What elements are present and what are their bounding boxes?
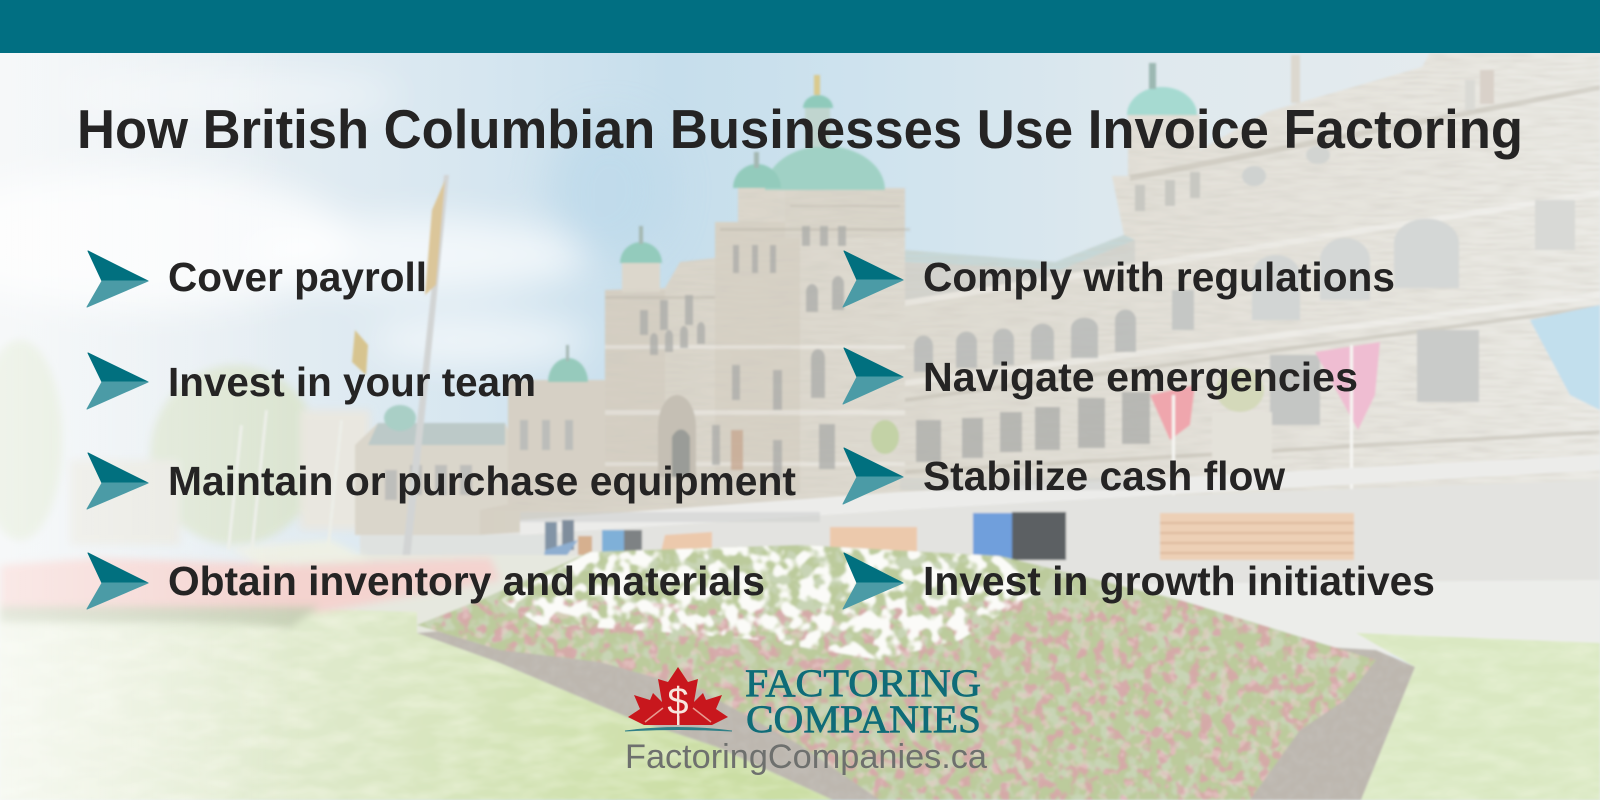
wordmark: FACTORING — [745, 662, 981, 705]
icon: arrow — [87, 353, 148, 409]
hanging banners — [871, 305, 1600, 522]
item: Maintain or purchase equipment — [87, 453, 796, 509]
icon: arrow — [87, 553, 148, 609]
icon: arrow — [843, 251, 903, 307]
pavement behind beds — [300, 555, 620, 640]
item: Obtain inventory and materials — [87, 553, 765, 609]
main building facade — [480, 53, 1600, 590]
label: Maintain or purchase equipment — [168, 458, 796, 504]
domes — [620, 55, 1300, 263]
label: Navigate emergencies — [923, 354, 1358, 400]
icon: arrow — [843, 553, 903, 609]
label: Obtain inventory and materials — [168, 558, 765, 604]
windows — [640, 70, 1575, 480]
logo — [625, 662, 987, 776]
wordmark: COMPANIES — [746, 698, 981, 741]
white left-side fade — [0, 53, 300, 800]
item: Cover payroll — [87, 251, 427, 307]
plinth, wall and balustrade — [360, 455, 1600, 600]
people, benches and bins — [542, 512, 1354, 568]
label: Comply with regulations — [923, 254, 1395, 300]
icon: maple leaf with dollar sign: $ — [667, 681, 689, 723]
flag poles — [227, 175, 449, 560]
background trees — [0, 340, 370, 545]
list: right column — [843, 251, 1435, 609]
walkway — [1000, 580, 1600, 655]
item: Invest in your team — [87, 353, 536, 409]
icon: maple leaf with dollar sign — [625, 667, 732, 731]
item: Invest in growth initiatives — [843, 553, 1435, 609]
left wing of building — [355, 345, 608, 535]
label: Stabilize cash flow — [923, 453, 1285, 499]
item: Stabilize cash flow — [843, 448, 1285, 504]
icon: arrow — [843, 348, 903, 404]
list: left column — [87, 251, 796, 609]
label: Invest in growth initiatives — [923, 558, 1435, 604]
icon: arrow — [87, 251, 148, 307]
wordmark — [745, 662, 981, 741]
title: How British Columbian Businesses Use Invoice Factoring — [77, 98, 1523, 160]
banded stonework — [605, 190, 1600, 466]
stone texture — [480, 53, 1600, 510]
top band — [0, 0, 1600, 53]
item: Navigate emergencies — [843, 348, 1358, 404]
left red flower bed — [0, 540, 500, 628]
website: FactoringCompanies.ca — [625, 738, 987, 776]
item: Comply with regulations — [843, 251, 1395, 307]
right lawn — [1356, 633, 1600, 800]
left lawn — [0, 600, 833, 800]
icon: arrow — [87, 453, 148, 509]
label: Cover payroll — [168, 254, 427, 300]
label: Invest in your team — [168, 359, 536, 405]
icon: arrow — [843, 448, 903, 504]
flower bed — [417, 545, 1415, 800]
